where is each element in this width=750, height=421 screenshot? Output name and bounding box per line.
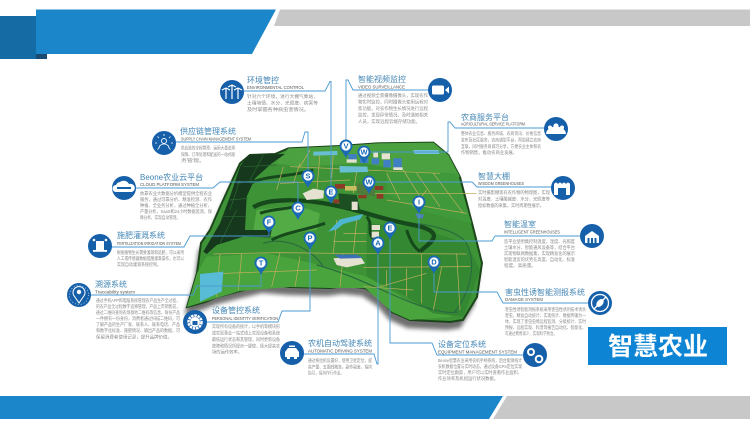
panel: equipment positioning system <box>438 339 547 382</box>
description: 保留消费者使用记录，提升品牌价值。 <box>96 334 172 340</box>
panel: wisdom greenhouses <box>478 171 575 209</box>
description: 对温度、土壤酸碱度、水分、光照度等 <box>478 196 551 202</box>
heading: 溯源系统 <box>95 279 127 289</box>
description <box>478 189 551 209</box>
map pins: W <box>360 148 368 157</box>
heading: 施肥灌溉系统 <box>117 230 165 240</box>
description: 监控，发现异常情况，及时通知相关 <box>358 112 429 118</box>
icon: hub <box>152 131 176 155</box>
description: 根据植物生长需要灌溉和追肥，可以采用 <box>117 249 184 256</box>
description: 服务，通过可靠分析、精准检测、农作 <box>140 196 213 203</box>
description: 人工或传感器数据提醒灌溉操作，也可以 <box>117 255 185 262</box>
description: 人员，实现远程云端存储功能。 <box>358 118 420 125</box>
heading: 智慧大棚 <box>478 171 510 181</box>
subheading: INTELLIGENT GREENHOUSES <box>504 230 560 234</box>
description: 物实时监控，同时摄像头使用远程对 <box>358 98 429 106</box>
description <box>212 323 281 356</box>
icon: greenhouse row <box>551 176 575 200</box>
description <box>461 130 542 156</box>
description: 害虫性诱智能测报系统采用害虫性诱剂技术诱杀 <box>505 306 587 313</box>
description: 保障、订单处理和配送的一站式服 <box>181 151 235 158</box>
icon: gears <box>523 343 547 367</box>
icon: wind turbines <box>220 80 244 104</box>
description: 及时掌握各种病虫害情况。 <box>247 106 309 113</box>
map pins <box>254 140 440 275</box>
panel: equipment control system <box>183 305 281 356</box>
map pins: A <box>375 239 381 248</box>
map pins: P <box>307 234 313 243</box>
icon: car <box>280 341 304 365</box>
description: 一件拥有一份身份，消费者通过扫描二维码，可 <box>96 315 181 322</box>
description: 农机数据位置与实时动态，通过设备GPS定位实现 <box>438 363 523 370</box>
description: 发布及社区服务，农商通型平台，帮助建立农商 <box>461 136 542 144</box>
description: 智能温室的优势在高度、自动化、标准 <box>504 256 576 263</box>
description: 可通过费用减少，实现科学防治。 <box>505 330 557 337</box>
map pins: E <box>328 188 334 197</box>
description: 体，实现了害虫虫情远程监测、分级统计、实时 <box>505 318 587 325</box>
icon: location shield <box>67 283 91 307</box>
heading: 设备管控系统 <box>212 305 260 315</box>
map pins: C <box>295 204 301 213</box>
description: 种植、全业务分析，通过种植全分析、 <box>140 202 212 209</box>
description: 场的运作效率。 <box>212 348 242 356</box>
description: 程度、高质量。 <box>504 262 536 269</box>
subheading: FERTILIZATION IRRIGATION SYSTEM <box>117 241 181 246</box>
panel: intelligent greenhouses <box>504 219 604 269</box>
subheading: PERSONAL IDENTITY VERIFICATION <box>212 316 278 321</box>
description <box>247 93 319 113</box>
map pins: S <box>305 172 311 181</box>
description: 障分析，实现自动管理。 <box>140 214 180 221</box>
description: Beone智慧农业采用农机手柄系统，后台能够统计 <box>438 357 523 364</box>
description: 土壤水分、智能通风设备等，结合平台 <box>504 244 576 251</box>
title label: 智慧农业 <box>588 327 727 365</box>
description: 整体农业信息、服务商城、农商资讯、价格信息 <box>461 130 542 137</box>
heading: 智能视频监控 <box>358 74 406 84</box>
heading: 害虫性诱智能测报系统 <box>505 287 585 297</box>
description <box>140 190 213 221</box>
icon: no pest <box>588 291 612 315</box>
map pins: D <box>431 258 437 267</box>
panel: Beone cloud platform <box>112 172 213 221</box>
description: 针对六个环境，进行大棚气象站， <box>247 93 318 100</box>
description: 通过手机APP和电脑系统管理农产品生产全过程， <box>96 297 180 304</box>
title label: 智慧农业: 智慧农业 <box>608 333 708 361</box>
description <box>358 92 429 125</box>
description: 的农产品全过程数字追溯管理，产品上市销售前， <box>96 303 180 310</box>
bottom banner <box>0 396 750 419</box>
description: 作物销售，推动农商业发展。 <box>461 149 517 156</box>
description: 高产量、五圈线精准，副作副差，指向 <box>308 364 372 370</box>
subheading: DAMAGE SYSTEM <box>505 297 543 302</box>
description: 土壤墒情、水分、光照度、病害等 <box>247 100 319 106</box>
icon: gear with lock <box>183 310 207 334</box>
description <box>117 249 185 268</box>
description: 故障和情况所提示一键使，极大提高农 <box>212 342 281 350</box>
heading: 环境管控 <box>247 75 279 85</box>
panel: environmental control <box>220 75 319 113</box>
heading: 智能温室 <box>504 219 536 229</box>
description: 通过二维码查询农场基地二维码等信息，每份产品 <box>96 309 181 316</box>
description: 通过视频全景摄像摄像头，实现农作 <box>358 92 429 99</box>
map pins: F <box>267 218 272 227</box>
map pins: I <box>418 198 420 207</box>
description: 实现物联网数据集，实现精准化的展示 <box>504 250 576 257</box>
description: 成实现事业一站式线上实现设备和系统 <box>212 330 281 336</box>
description: 实时定位跟踪，用户可以实时查看作业面积、 <box>438 369 522 376</box>
description: 务管理。 <box>181 157 205 164</box>
description: 实时摄影棚现有农作物的物理图，实现 <box>478 189 551 196</box>
subheading: Traceability system <box>95 290 135 294</box>
heading: 农机自动驾驶系统 <box>308 338 372 348</box>
icon: cloud <box>112 176 136 200</box>
description: 焦功能，对农作物生长情况进行远程 <box>358 105 429 112</box>
panel: automatic driving system <box>280 338 373 376</box>
subheading: EQUIPMENT MANAGEMENT SYSTEM <box>438 350 517 354</box>
icon: glasshouse <box>580 224 604 248</box>
description <box>308 357 373 376</box>
panel: agricultural service platform <box>461 112 568 156</box>
description: 产量分析，SaaS和24小时数据监测，保 <box>140 208 213 215</box>
subheading: CLOUD PLATFORM SYSTEM <box>140 182 199 187</box>
description <box>96 297 181 340</box>
subheading: SUPPLY CHAIN MANAGEMENT SYSTEM <box>181 136 251 142</box>
heading: 设备定位系统 <box>438 339 486 349</box>
farm map <box>184 143 482 330</box>
panel: video surveillance <box>358 74 452 125</box>
description: 预报、远程实现、科普等报告自动化、智能化、 <box>505 324 586 331</box>
description: 实现所有设备的统计，以手机等模块形 <box>212 323 281 330</box>
leader lines <box>87 80 590 364</box>
map pins: W <box>365 178 373 187</box>
description <box>438 357 523 382</box>
map pins: T <box>259 259 264 268</box>
description: 害虫，精准自动统计、实现统计、数据传输为一 <box>505 312 587 319</box>
panel: traceability system <box>67 279 181 340</box>
subheading: AGRICULTURAL SERVICE PLATFORM <box>461 122 525 126</box>
description: 依靠农业大数据分析模型提供全程农业 <box>140 190 213 197</box>
map pins: V <box>343 142 349 151</box>
description: 和数字化标准、施肥情况、输出产品的数据，可 <box>96 327 181 334</box>
description: 实现自动灌溉系统控制。 <box>117 261 161 268</box>
subheading: AUTOMATIC DRIVING SYSTEM <box>308 348 372 354</box>
description <box>505 306 587 337</box>
description <box>504 238 576 269</box>
panel: fertilization irrigation system <box>88 230 185 268</box>
icon: video camera <box>428 78 452 102</box>
panel: supply chain management <box>152 126 251 164</box>
heading: 供应链管理系统 <box>180 126 236 136</box>
icon: irrigation <box>88 234 112 258</box>
subheading: VIDEO SURVEILLANCE <box>358 84 405 90</box>
description: 通过拖拉机设置好，使用卫星定位，提 <box>308 357 373 364</box>
subheading: ENVIRONMENTAL CONTROL <box>247 85 304 90</box>
description: 指引，保持作行作业。 <box>308 370 344 376</box>
map pins: E <box>387 224 393 233</box>
panel: pest forecast system <box>505 287 612 337</box>
description: 作业效率及机组运行状况数据。 <box>438 375 498 382</box>
description: 互联，同时服务商城可分享，方便农业主体和农 <box>461 143 542 150</box>
description: 了解产品的生产厂家、联系人、联系电话、产品 <box>96 321 181 328</box>
icon: people <box>544 117 568 141</box>
description: 监平业使用集控制温度、湿度、光照度 <box>504 238 576 245</box>
heading: Beone农业云平台 <box>140 172 203 182</box>
top banner <box>0 10 750 59</box>
description: 指标数据的采集，实时周期性展示。 <box>478 202 544 209</box>
description: 最低运行状态和其管理，同时更新设备 <box>212 336 281 343</box>
subheading: WISDOM GREENHOUSES <box>478 181 524 186</box>
description: 供应链的全程管理、运用大量追溯 <box>181 144 235 152</box>
description <box>181 144 235 164</box>
heading: 农商服务平台 <box>461 112 509 122</box>
